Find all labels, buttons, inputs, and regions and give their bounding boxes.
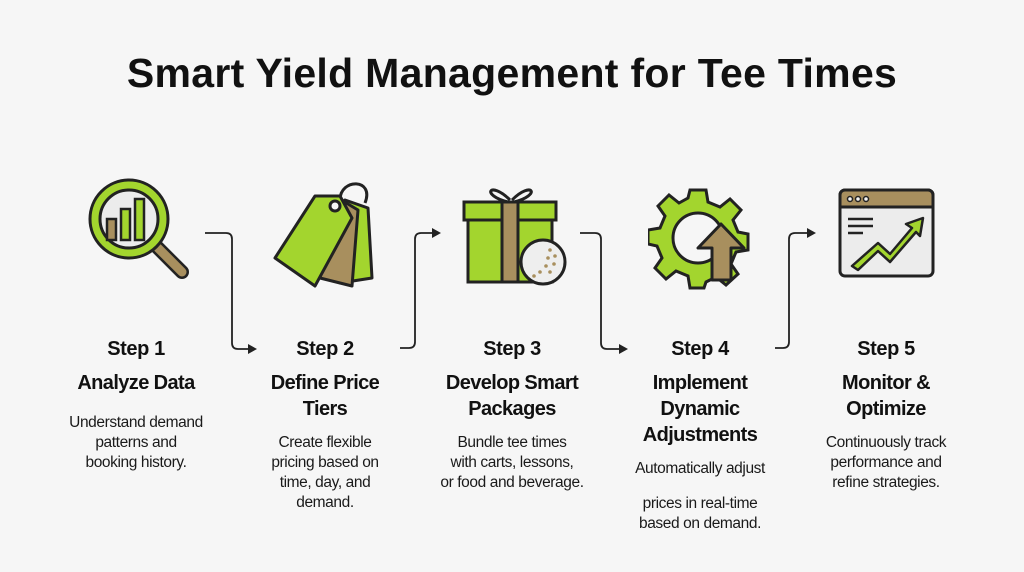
icon: browser with trend arrow	[838, 188, 934, 278]
icon: gift box with golf ball	[462, 188, 566, 286]
icon: price tags	[273, 182, 374, 288]
panel: step 1	[69, 338, 203, 471]
description: based on demand.	[639, 515, 761, 532]
icon: gear with up arrow	[648, 188, 750, 290]
description	[69, 414, 203, 471]
arrow: step 2 to 3	[400, 228, 441, 349]
heading	[446, 372, 579, 420]
heading: Adjustments	[643, 424, 757, 446]
description: Create flexible	[278, 434, 372, 451]
heading: Optimize	[846, 398, 926, 420]
step label: Step 4	[671, 338, 729, 360]
arrow: step 4 to 5	[775, 228, 816, 349]
panel: step 2	[271, 338, 380, 511]
heading: Implement	[653, 372, 747, 394]
step label: Step 3	[483, 338, 541, 360]
heading	[643, 372, 758, 446]
description: refine strategies.	[832, 474, 940, 491]
heading: Packages	[468, 398, 556, 420]
panel: step 4	[635, 338, 766, 532]
step label: Step 2	[296, 338, 354, 360]
heading	[842, 372, 930, 420]
heading: Tiers	[303, 398, 347, 420]
description: Continuously track	[826, 434, 946, 451]
description	[826, 434, 946, 491]
arrow: step 3 to 4	[580, 232, 628, 354]
description: booking history.	[85, 454, 186, 471]
heading: Dynamic	[660, 398, 740, 420]
heading: Define Price	[271, 372, 379, 394]
heading: Develop Smart	[446, 372, 578, 394]
description: with carts, lessons,	[451, 454, 573, 471]
description: demand.	[296, 494, 354, 511]
panel: step 5	[826, 338, 946, 491]
description: or food and beverage.	[440, 474, 584, 491]
description: patterns and	[95, 434, 177, 451]
description	[440, 434, 584, 491]
description	[271, 434, 379, 511]
arrow: step 1 to 2	[205, 232, 257, 354]
heading: Monitor &	[842, 372, 930, 394]
heading: Analyze Data	[77, 372, 195, 394]
description: pricing based on	[271, 454, 379, 471]
heading	[271, 372, 380, 420]
description: Understand demand	[69, 414, 203, 431]
description: Automatically adjust prices in real-time	[635, 460, 765, 512]
description: time, day, and	[280, 474, 370, 491]
icon: magnifier with bar chart	[88, 178, 189, 279]
description: performance and	[830, 454, 942, 471]
description: Bundle tee times	[457, 434, 567, 451]
step label: Step 1	[107, 338, 165, 360]
step label: Step 5	[857, 338, 915, 360]
title: Smart Yield Management for Tee Times	[127, 50, 897, 96]
panel: step 3	[440, 338, 584, 491]
